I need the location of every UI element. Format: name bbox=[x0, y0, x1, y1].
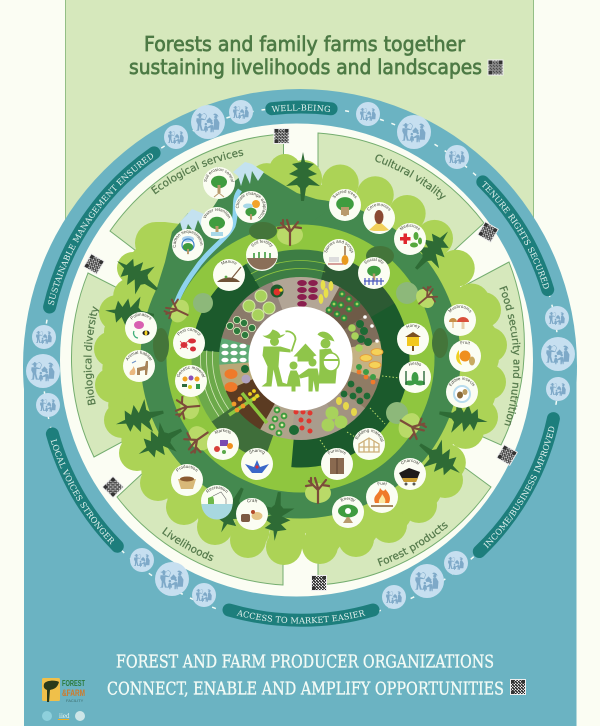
panel: Livelihoods bbox=[116, 474, 284, 586]
farm sector ring bbox=[207, 265, 394, 452]
icon: Recreation bbox=[201, 485, 233, 520]
icon: Soil fertility bbox=[246, 239, 278, 271]
icon: Fuel bbox=[366, 481, 398, 513]
icon: Manure bbox=[213, 259, 245, 291]
panel colour behind the mountain bbox=[143, 158, 266, 224]
crops: beets and yellow plants bbox=[297, 280, 333, 307]
icon: Pest control: Pest control bbox=[177, 328, 202, 336]
qr codes on panels bbox=[83, 128, 518, 591]
icon: Sharing bbox=[241, 448, 273, 480]
panel: Food security and nutrition: Food security and nutrition bbox=[499, 286, 522, 426]
panel: Biological diversity: Biological diversity bbox=[83, 306, 100, 406]
panel: Ecological services: Ecological services bbox=[150, 150, 244, 194]
logos: partners bbox=[42, 711, 85, 721]
icon: Herbs bbox=[399, 361, 431, 393]
icon: Manure: Manure bbox=[221, 260, 236, 265]
qr code: title bbox=[488, 60, 504, 76]
icon: Pest control bbox=[173, 327, 205, 359]
icon: Charcoal bbox=[394, 458, 426, 490]
icon: Climate change adaptation: Climate change adaptation bbox=[236, 192, 266, 219]
crops: cauliflower bbox=[226, 316, 256, 339]
icon: Craft bbox=[236, 498, 268, 530]
icon: Markets bbox=[207, 428, 239, 460]
title: sustaining livelihoods and landscapes bbox=[129, 55, 482, 79]
icon: Fuel: Fuel bbox=[377, 482, 387, 486]
trees: brown branched trees bbox=[162, 220, 441, 503]
icon: Fruit: Fruit bbox=[460, 341, 470, 345]
icon: Carbon sequestration: Carbon sequestration bbox=[172, 230, 202, 248]
icon: Animal habitat bbox=[123, 350, 155, 382]
ring label: ACCESS TO MARKET EASIER bbox=[222, 604, 380, 627]
icon: Stories and songs bbox=[323, 239, 355, 271]
lighter bushes upper left bbox=[117, 154, 301, 284]
icon: Production: Production bbox=[176, 464, 198, 472]
icon: Furniture bbox=[321, 448, 353, 480]
icon: Carbon sequestration bbox=[172, 229, 204, 261]
icon: Water retention bbox=[201, 207, 233, 239]
icon: Soil erosion control: Soil erosion control bbox=[204, 168, 234, 182]
logo: Forest and Farm Facility: FACILITY bbox=[66, 698, 84, 703]
panel: top green background bbox=[66, 0, 534, 368]
crops: cross field bbox=[229, 389, 267, 423]
logo: Forest and Farm Facility: &FARM bbox=[62, 688, 85, 698]
icon: Craft: Craft bbox=[247, 499, 258, 503]
panel: Food security and nutrition bbox=[460, 261, 525, 446]
ring label: LOCAL VOICES STRONGER: LOCAL VOICES STRONGER bbox=[49, 438, 117, 547]
mountains bbox=[150, 162, 335, 310]
icon: Soil erosion control bbox=[203, 167, 235, 199]
icon: Genetic material: Genetic material bbox=[176, 366, 206, 378]
icon: Energy bbox=[332, 496, 364, 528]
icon: Sacred trees bbox=[329, 189, 361, 221]
icon: Stories and songs: Stories and songs bbox=[324, 240, 354, 253]
panel: Biological diversity bbox=[71, 272, 122, 458]
panel: Forest products: Forest products bbox=[377, 522, 448, 566]
green scalloped landscape bbox=[94, 178, 507, 565]
trees: dark pines bbox=[104, 152, 491, 542]
icon: Medicines: Medicines bbox=[400, 224, 420, 230]
icon: Building material bbox=[353, 428, 385, 460]
inner lime ring bbox=[166, 224, 434, 492]
icon: Fruit bbox=[449, 340, 481, 372]
panel: Cultural vitality: Cultural vitality bbox=[375, 154, 446, 200]
icon: Production bbox=[171, 464, 203, 496]
icon: Social life: Social life bbox=[364, 258, 384, 264]
icon: Animal habitat: Animal habitat bbox=[126, 350, 152, 361]
logo: Forest and Farm Facility bbox=[42, 678, 85, 703]
icons: community circles on outcome ring bbox=[26, 100, 575, 609]
crops: cabbages bbox=[322, 406, 348, 432]
icon: Markets: Markets bbox=[214, 428, 231, 434]
icon: Edible insects: Edible insects bbox=[448, 376, 474, 386]
icon: Charcoal: Charcoal bbox=[401, 460, 420, 465]
ring label: ACCESS TO MARKET EASIER: ACCESS TO MARKET EASIER bbox=[236, 610, 366, 624]
icon: Water retention: Water retention bbox=[203, 208, 230, 218]
icon: Genetic material bbox=[175, 365, 207, 397]
outcome ring dashed line bbox=[43, 107, 559, 623]
river bbox=[176, 190, 240, 304]
icon: Ceremonies bbox=[363, 202, 395, 234]
closing statement: CONNECT, ENABLE AND AMPLIFY OPPORTUNITIES bbox=[107, 680, 504, 700]
crops: green rings sector bbox=[327, 292, 359, 320]
ring label: SUSTAINABLE MANAGEMENT ENSURED: SUSTAINABLE MANAGEMENT ENSURED bbox=[46, 150, 156, 306]
crops: red flower bbox=[270, 284, 284, 298]
title bbox=[129, 32, 482, 79]
icon: Social life bbox=[358, 257, 390, 289]
crops: plants and potatoes bbox=[336, 381, 370, 416]
trees: shrubs bbox=[153, 222, 448, 424]
logo: Forest and Farm Facility: FOREST bbox=[62, 679, 85, 688]
panel: Livelihoods: Livelihoods bbox=[162, 527, 214, 561]
white inner disc bbox=[60, 124, 533, 596]
crops: tomatoes bbox=[289, 410, 312, 435]
icon: Sacred trees: Sacred trees bbox=[332, 190, 357, 198]
dark green band bbox=[140, 198, 460, 518]
icon: Energy: Energy bbox=[340, 498, 356, 502]
ring label: WELL-BEING bbox=[265, 100, 338, 116]
icon: Medicines bbox=[394, 223, 426, 255]
icon: Honey bbox=[397, 323, 429, 355]
icon: Soil fertility: Soil fertility bbox=[251, 240, 273, 247]
ring label: TENURE RIGHTS SECURED: TENURE RIGHTS SECURED bbox=[482, 180, 549, 289]
crops: squash and carrots bbox=[356, 349, 383, 384]
ring label: INCOME/BUSINESS IMPROVED: INCOME/BUSINESS IMPROVED bbox=[483, 426, 554, 548]
icon: Herbs: Herbs bbox=[408, 362, 422, 366]
icon: Edible insects bbox=[446, 376, 478, 408]
panel: Cultural vitality bbox=[318, 132, 484, 255]
crop fields ring bbox=[161, 219, 440, 498]
crops: clover sector bbox=[348, 315, 379, 352]
icon: Mushrooms: Mushrooms bbox=[448, 305, 472, 312]
icon: Sharing: Sharing bbox=[249, 448, 265, 454]
icon: Mushrooms bbox=[444, 304, 476, 336]
icon: Pollinators bbox=[125, 312, 157, 344]
closing statement: FOREST AND FARM PRODUCER ORGANIZATIONS bbox=[116, 652, 494, 672]
panel: Ecological services bbox=[109, 134, 284, 250]
logos: partners: iied bbox=[59, 712, 70, 720]
icon: Pollinators: Pollinators bbox=[130, 313, 152, 320]
icon: Honey: Honey bbox=[406, 324, 420, 328]
panel: Forest products bbox=[318, 467, 492, 585]
icon: Building material: Building material bbox=[355, 430, 384, 442]
icon: Recreation: Recreation bbox=[206, 486, 228, 493]
crops: pumpkins bbox=[224, 365, 250, 392]
crops: big green rings bbox=[243, 290, 275, 321]
centre circle with family bbox=[248, 306, 352, 410]
ring label: WELL-BEING: WELL-BEING bbox=[271, 104, 330, 112]
title: Forests and family farms together bbox=[144, 32, 466, 56]
icon: Furniture: Furniture bbox=[328, 448, 346, 454]
icon: Ceremonies: Ceremonies bbox=[367, 204, 390, 211]
crops: white mounds bbox=[221, 344, 247, 362]
closing statement bbox=[107, 652, 504, 700]
dashed lines to icons bbox=[320, 376, 400, 452]
crops: rings lower bbox=[270, 408, 286, 435]
qr code: bottom bbox=[510, 679, 526, 695]
